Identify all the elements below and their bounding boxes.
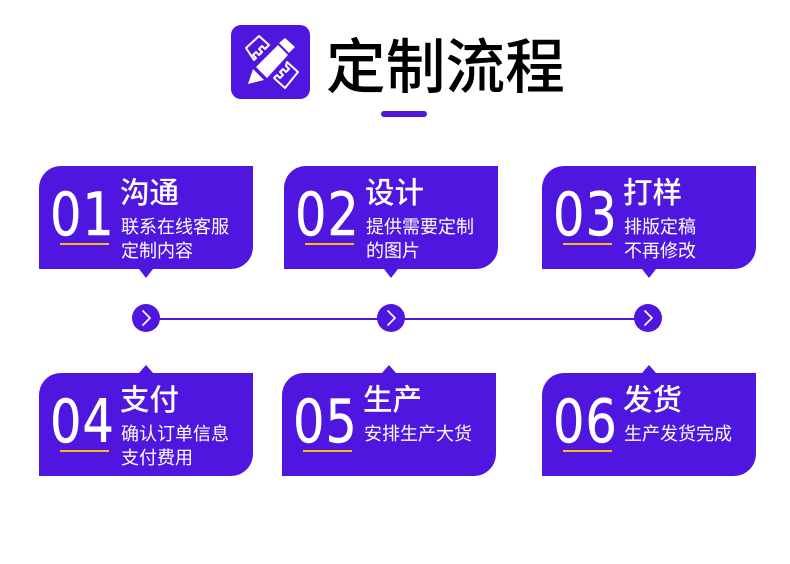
panel: step 02: 提供需要定制 [366, 213, 474, 239]
panel: step 06: 生产发货完成 [624, 420, 732, 446]
title underline [381, 111, 427, 117]
panel: step 04: 04 [50, 387, 115, 457]
panel: step 04: 支付 [120, 377, 179, 419]
panel: step 05: 05 [293, 387, 358, 457]
panel: step 06: 发货 [623, 377, 682, 419]
icon: pencil and ruler [231, 25, 310, 99]
panel: step 06: 06 [553, 387, 618, 457]
icon: arrow node 2 [377, 304, 405, 332]
icon: arrow node 3 [634, 304, 662, 332]
panel: step 01 [39, 166, 253, 269]
timeline line [146, 318, 648, 320]
panel: step 04 [39, 373, 253, 476]
panel: step 01: 联系在线客服 [121, 213, 229, 239]
panel: step 02: 的图片 [366, 237, 420, 263]
panel: step 06 [542, 373, 756, 476]
icon: arrow node 1 [132, 304, 160, 332]
panel: step 01: 01 [50, 180, 115, 250]
panel: step 01: 沟通 [120, 170, 179, 212]
panel: step 03 [542, 166, 756, 269]
panel: step 02: 设计 [365, 170, 424, 212]
panel: step 05: 安排生产大货 [364, 420, 472, 446]
panel: step 03: 排版定稿 [624, 213, 696, 239]
panel: step 03: 不再修改 [624, 237, 696, 263]
panel: step 02: 02 [295, 180, 360, 250]
panel: step 05: 生产 [363, 377, 422, 419]
panel: step 03: 03 [553, 180, 618, 250]
panel: step 03: 打样 [623, 170, 682, 212]
panel: step 01: 定制内容 [121, 237, 193, 263]
title: 定制流程 [326, 20, 565, 106]
panel: step 02 [284, 166, 498, 269]
panel: step 04: 支付费用 [121, 444, 193, 470]
panel: step 05 [282, 373, 496, 476]
panel: step 04: 确认订单信息 [121, 420, 229, 446]
